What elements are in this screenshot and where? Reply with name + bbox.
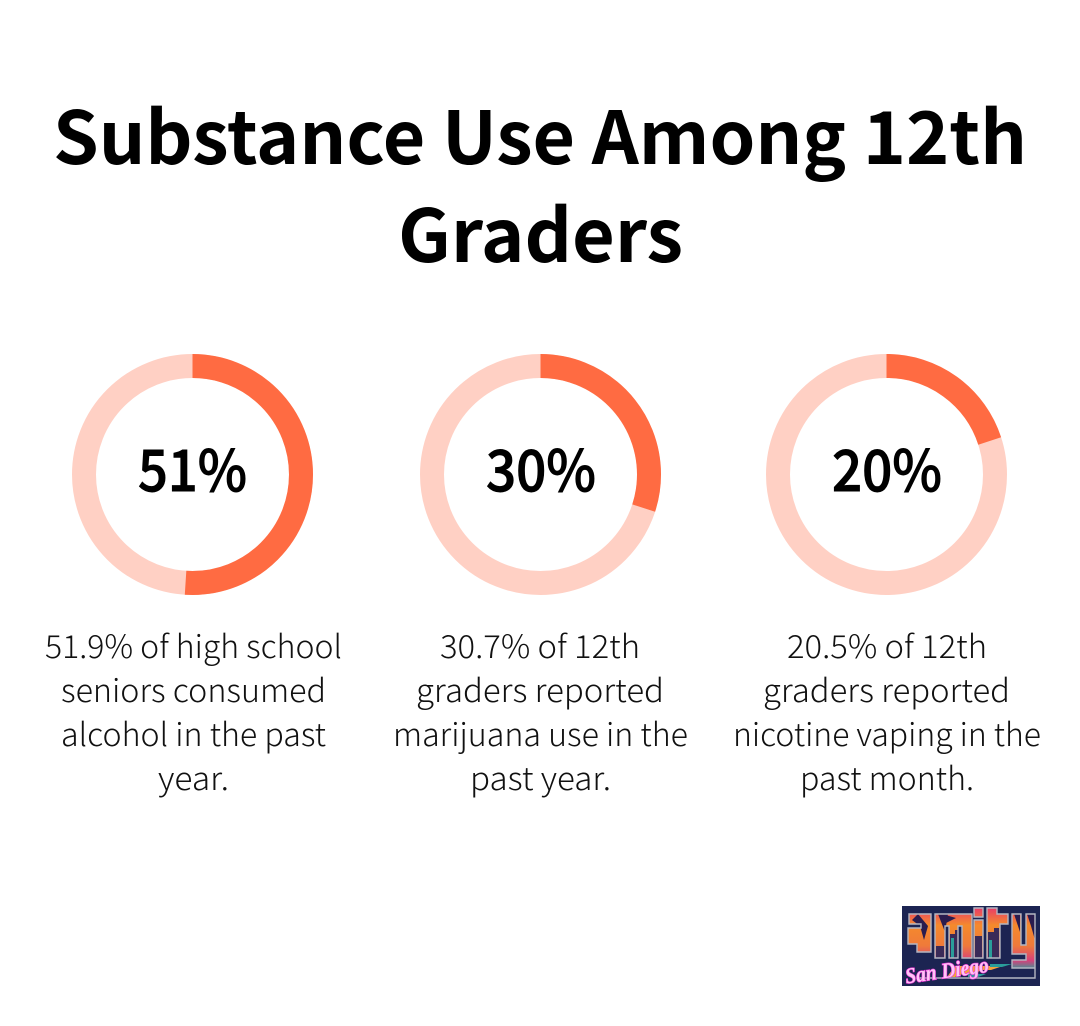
description: marijuana: marijuana use in the	[393, 710, 688, 756]
donut chart: 30%	[432, 366, 649, 583]
description: nicotine vaping: 20.5% of 12th	[787, 622, 987, 668]
description: alcohol: seniors consumed	[61, 666, 326, 712]
logo beach stripes	[947, 966, 1003, 977]
value: 30%: 30%	[486, 426, 596, 508]
title: Substance Use Among 12th	[53, 80, 1027, 186]
panel: alcohol	[45, 366, 342, 800]
description: alcohol: alcohol in the past	[61, 710, 326, 756]
panel: nicotine vaping	[733, 366, 1041, 800]
description: nicotine vaping: past month.	[800, 754, 974, 800]
description: alcohol: year.	[158, 754, 229, 800]
title: Graders	[398, 178, 683, 284]
logo script: San Diego	[903, 952, 990, 988]
description: alcohol: 51.9% of high school	[45, 622, 342, 668]
description: marijuana: graders reported	[416, 666, 664, 712]
description: nicotine vaping: graders reported	[763, 666, 1010, 712]
logo letters	[906, 906, 1038, 978]
title	[53, 80, 1027, 284]
description: alcohol	[45, 622, 342, 800]
value: 51%: 51%	[138, 426, 247, 508]
logo: Amity San Diego	[902, 906, 1040, 988]
donut chart: 20%	[778, 366, 995, 583]
description: nicotine vaping	[733, 622, 1041, 800]
description: nicotine vaping: nicotine vaping in the	[733, 710, 1041, 756]
description: marijuana: past year.	[470, 754, 611, 800]
value: 20%: 20%	[832, 426, 942, 508]
description: marijuana: 30.7% of 12th	[440, 622, 640, 668]
donut chart: 51%	[84, 366, 301, 583]
description: marijuana	[393, 622, 688, 800]
panel: marijuana	[393, 366, 688, 800]
